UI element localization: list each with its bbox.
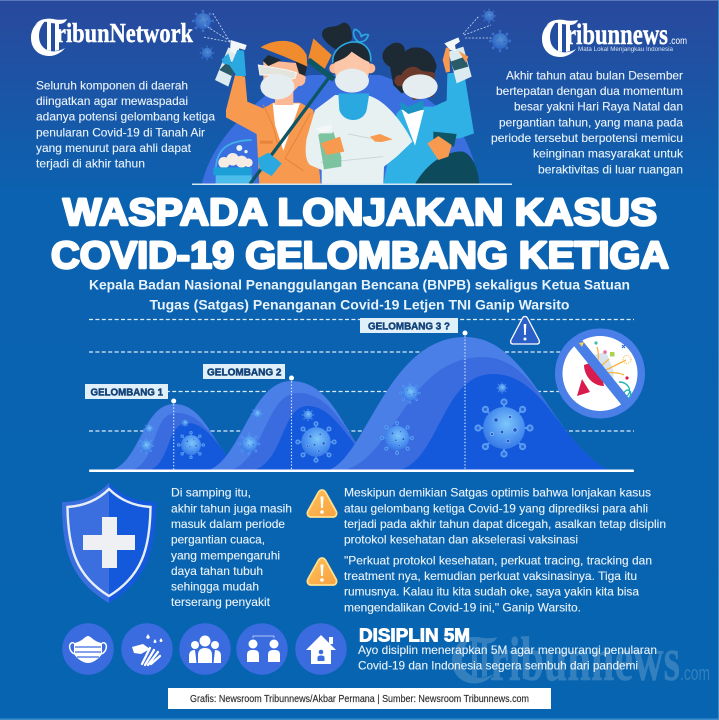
icon: stay home — [295, 623, 347, 675]
icon: washing hands — [121, 623, 173, 675]
label: gelombang 3: GELOMBANG 3 ? — [368, 321, 450, 332]
text block: ayo disiplin: Ayo disiplin menerapkan 5M agar mengurangi penularan — [358, 643, 657, 657]
footer credit: Grafis: Newsroom Tribunnews/Akbar Permana | Sumber: Newsroom Tribunnews.com — [190, 693, 529, 705]
wave 2 — [205, 381, 378, 471]
wave 1 — [108, 404, 240, 471]
text block: meskipun — [344, 486, 666, 547]
icon: bucket — [213, 140, 253, 184]
text block: di samping itu: daya tahan tubuh — [171, 564, 263, 578]
text block: meskipun: protokol kesehatan dan akselerasi vaksinasi — [344, 533, 578, 547]
logo: Tribun Network: ribunNetwork — [56, 18, 193, 48]
logo: Tribun Network — [31, 18, 193, 56]
text block: di samping itu: masuk dalam periode — [171, 517, 285, 531]
text block: quote: treatment nya, kemudian perkuat vaksinasinya. Tiga itu — [344, 569, 637, 583]
wave 3 — [325, 337, 610, 471]
icon: spray mist right — [463, 9, 511, 52]
text block: top left: adanya potensi gelombang ketiga — [36, 110, 215, 124]
logo: Tribunnews — [542, 18, 687, 57]
text block: top left: diingatkan agar mewaspadai — [36, 94, 188, 108]
label: gelombang 1 — [85, 384, 168, 399]
text block: di samping itu: Di samping itu, — [171, 486, 251, 500]
logo: Tribunnews: Mata Lokal Menjangkau Indonesia — [578, 46, 673, 53]
text block: top left: terjadi di akhir tahun — [36, 157, 145, 171]
text block: top right: beraktivitas di luar ruangan — [538, 162, 683, 176]
subtitle: Kepala Badan Nasional Penanggulangan Bencana (BNPB) sekaligus Ketua Satuan — [89, 276, 630, 292]
icon: no party — [555, 328, 645, 418]
subtitle — [89, 276, 630, 312]
text block: ayo disiplin: Covid-19 dan Indonesia segera sembuh dari pandemi — [358, 658, 638, 672]
title: WASPADA LONJAKAN KASUS — [63, 192, 657, 234]
text block: quote: "Perkuat protokol kesehatan, perkuat tracing, tracking dan — [344, 553, 652, 567]
text block: top left — [36, 78, 215, 171]
text block: meskipun: Meskipun demikian Satgas optimis bahwa lonjakan kasus — [344, 486, 651, 500]
text block: meskipun: terjadi pada akhir tahun dapat dicegah, asalkan tetap disiplin — [344, 517, 666, 531]
figure: right woman — [382, 37, 479, 184]
heading: disiplin 5m: DISIPLIN 5M — [359, 626, 470, 646]
text block: top left: yang menurut para ahli dapat — [36, 141, 192, 155]
logo: Tribunnews: ribunnews — [566, 18, 668, 51]
label: gelombang 2 — [203, 364, 285, 379]
text block: ayo disiplin — [358, 643, 657, 672]
icon: spray bottle left — [215, 40, 247, 87]
icon: shield — [62, 483, 156, 603]
icon: warning orange 1 — [307, 490, 337, 517]
icon: warning orange 2 — [307, 558, 337, 585]
subtitle: Tugas (Satgas) Penanganan Covid-19 Letjen TNI Ganip Warsito — [150, 296, 570, 312]
title — [51, 192, 669, 277]
footer credit — [168, 688, 551, 709]
text block: di samping itu: terserang penyakit — [171, 595, 271, 609]
text block: top right: keinginan masyarakat untuk — [533, 147, 684, 161]
label: gelombang 2: GELOMBANG 2 — [207, 367, 282, 378]
text block: di samping itu: yang mempengaruhi — [171, 548, 280, 562]
text block: top right: pergantian tahun, yang mana pada — [499, 115, 683, 129]
text block: quote: mengendalikan Covid-19 ini," Ganip Warsito. — [344, 600, 581, 614]
icon: crowd — [179, 623, 231, 675]
icon: spray mist left — [192, 10, 230, 60]
text block: top right: periode tersebut berpotensi memicu — [491, 131, 683, 145]
label: gelombang 3 — [360, 318, 458, 333]
text block: quote: rumusnya. Kalau itu kita sudah oke, saya yakin kita bisa — [344, 585, 639, 599]
label: gelombang 1: GELOMBANG 1 — [90, 387, 163, 398]
text block: top right — [491, 68, 684, 176]
icon: broom — [250, 38, 334, 184]
illustration: three health workers — [202, 23, 479, 184]
text block: top right: bertepatan dengan dua momentum — [496, 84, 683, 98]
icon: distancing — [236, 623, 288, 675]
chart: three waves — [85, 318, 634, 472]
figure: orange worker — [226, 41, 321, 184]
logo: Tribunnews: .com — [669, 36, 687, 47]
figure: central woman — [306, 23, 412, 184]
text block: di samping itu — [171, 486, 292, 609]
text block: top left: penularan Covid-19 di Tanah Air — [36, 125, 205, 139]
title: COVID-19 GELOMBANG KETIGA — [51, 235, 669, 277]
text block: top right: Akhir tahun atau bulan Desember — [506, 68, 683, 82]
text block: top left: Seluruh komponen di daerah — [36, 78, 188, 92]
text block: di samping itu: pergantian cuaca, — [171, 533, 265, 547]
text block: quote — [344, 553, 652, 614]
icon: mask — [62, 623, 114, 675]
text block: di samping itu: akhir tahun juga masih — [171, 501, 292, 515]
text block: di samping itu: sehingga mudah — [171, 580, 259, 594]
text block: top right: besar yakni Hari Raya Natal dan — [514, 100, 683, 114]
icon: warning triangle blue — [511, 316, 539, 344]
text block: meskipun: atau gelombang ketiga Covid-19 yang diprediksi para ahli — [344, 501, 648, 515]
